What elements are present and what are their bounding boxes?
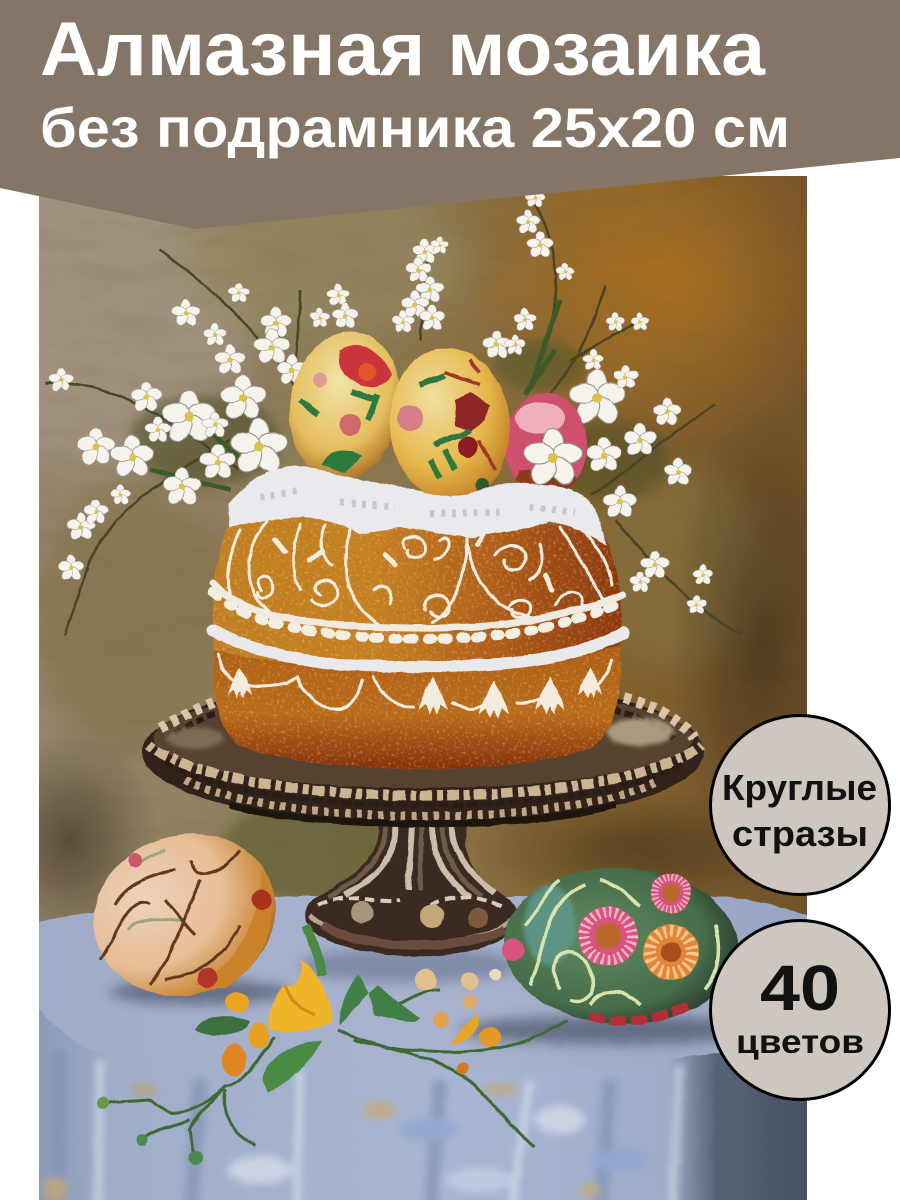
blossom stems and leaves — [45, 195, 742, 635]
icing band one — [213, 583, 623, 628]
badge: 40 colours: цветов — [736, 1023, 864, 1060]
cake stand — [142, 678, 704, 956]
icing leaf clusters — [228, 668, 602, 719]
subtitle: без подрамника 25х20 см — [40, 96, 790, 159]
painted egg: right pink — [505, 393, 587, 497]
painted egg: center — [390, 348, 510, 496]
table with blue cloth — [20, 896, 830, 1200]
foliage behind blossoms — [130, 340, 670, 500]
flower on pink egg — [524, 428, 582, 489]
icing swags lower tier — [218, 655, 612, 709]
cake lower tier — [213, 645, 620, 769]
cake top frosting — [233, 470, 600, 537]
painting background wall — [39, 176, 807, 922]
icing scrolls upper tier — [228, 522, 612, 630]
left background egg — [93, 833, 276, 996]
cake crumb texture — [212, 518, 622, 770]
yellow flower branch on table — [97, 925, 568, 1165]
white blossoms, branches — [49, 188, 713, 615]
cake body — [213, 515, 621, 769]
badge: round rhinestones: Круглые — [722, 767, 877, 808]
icing band two — [213, 630, 624, 667]
icing drips upper band — [213, 592, 623, 639]
painting: Easter cake still life — [39, 176, 807, 1200]
badge: round rhinestones — [710, 716, 890, 894]
header banner — [0, 0, 900, 229]
Easter cake — [205, 470, 630, 780]
badge: round rhinestones: стразы — [732, 813, 868, 854]
badge: 40 colours: 40 — [760, 952, 840, 1024]
badge: 40 colours — [710, 920, 890, 1100]
painted egg: left — [288, 332, 400, 478]
right foreground egg — [501, 864, 741, 1028]
title: Алмазная мозаика — [40, 7, 766, 92]
